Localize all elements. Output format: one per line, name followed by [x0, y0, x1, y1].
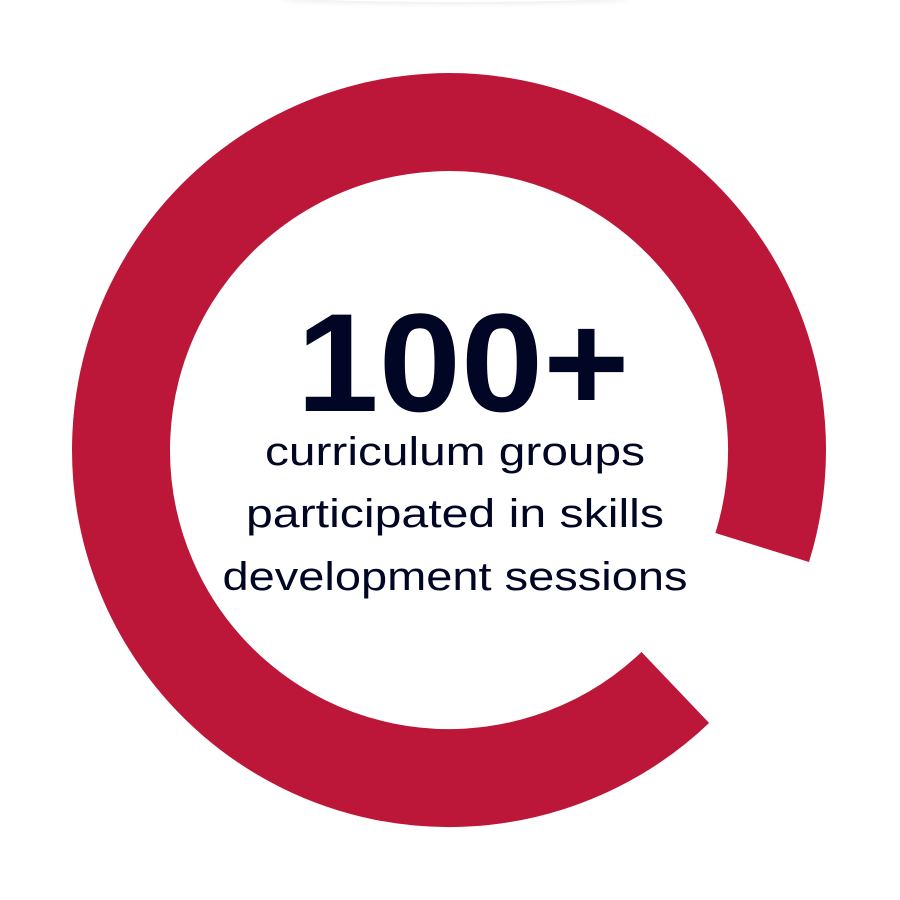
top shadow — [280, 0, 630, 2]
caption text: curriculum groups — [265, 430, 645, 474]
caption text: participated in skills — [246, 492, 664, 536]
caption text — [222, 430, 688, 599]
big number: 100+ — [296, 284, 630, 441]
ring chart — [121, 122, 777, 778]
caption text: development sessions — [222, 555, 688, 599]
